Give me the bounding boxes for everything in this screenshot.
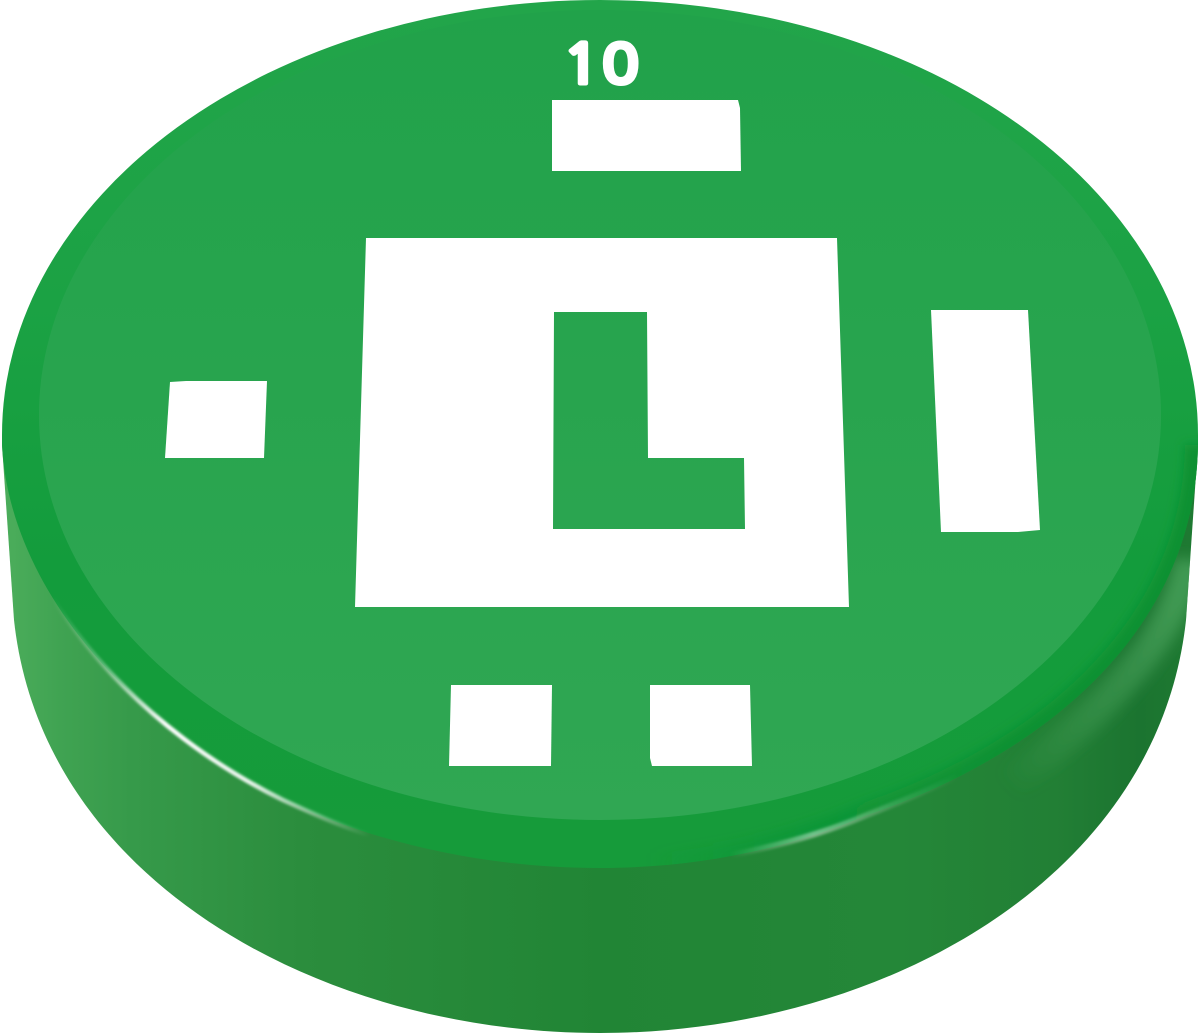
right rectangle xyxy=(931,310,1040,532)
bottom right square xyxy=(650,685,752,766)
number 10: 10 xyxy=(562,39,640,93)
token face xyxy=(39,10,1161,820)
token side wall xyxy=(2,445,1198,1033)
rim highlight left xyxy=(2,445,390,842)
central square with L cutout xyxy=(355,238,849,607)
top rectangle xyxy=(552,100,741,171)
left square xyxy=(165,381,267,458)
bottom left square xyxy=(449,685,552,766)
rim highlight right xyxy=(720,770,970,857)
rim shading on right edge xyxy=(791,444,1198,837)
